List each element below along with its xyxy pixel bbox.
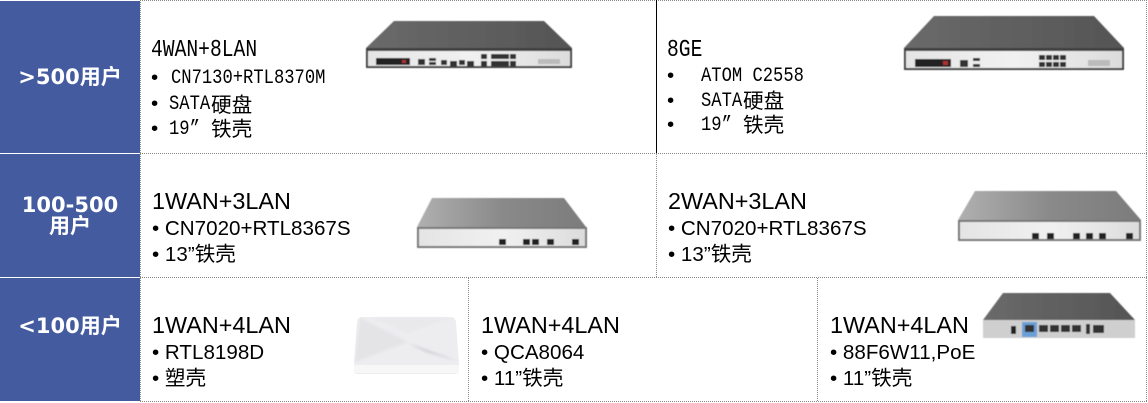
row label: >500 users xyxy=(0,1,140,153)
product cell: 2WAN+3LAN: • 13”铁壳 xyxy=(668,243,752,266)
product cell: 1WAN+3LAN: 1WAN+3LAN xyxy=(152,188,291,214)
product cell: 8GE: 8GE xyxy=(667,37,702,64)
product cell: 8GE: ATOM C2558 xyxy=(701,65,804,88)
product cell: 1WAN+3LAN: • 13”铁壳 xyxy=(152,243,236,266)
product cell: 4WAN+8LAN: 铁壳 xyxy=(211,112,252,142)
product cell: 1WAN+4LAN QCA8064: 1WAN+4LAN xyxy=(481,312,620,338)
product cell: 1WAN+4LAN QCA8064: • QCA8064 xyxy=(481,341,584,364)
product cell: 1WAN+4LAN RTL8198D: • 塑壳 xyxy=(152,367,206,390)
product cell: 4WAN+8LAN: • xyxy=(151,66,158,89)
icon: 19 inch router 8GE xyxy=(904,16,1124,70)
product cell: 1WAN+3LAN xyxy=(152,188,351,266)
row label: 100-500 users: 用户 xyxy=(49,214,91,238)
product cell: 1WAN+4LAN 88F6W11: • 88F6W11,PoE xyxy=(830,341,975,364)
product cell: 2WAN+3LAN: • CN7020+RTL8367S xyxy=(668,217,867,240)
product cell: 1WAN+4LAN 88F6W11: 1WAN+4LAN xyxy=(830,312,969,338)
row label: 100-500 users: 100-500 xyxy=(22,192,118,216)
product cell: 2WAN+3LAN xyxy=(668,188,867,266)
icon: desktop router 88F6W11 xyxy=(983,293,1135,338)
product cell: 8GE: • xyxy=(667,113,674,136)
product cell: 1WAN+3LAN: • CN7020+RTL8367S xyxy=(152,217,351,240)
icon: 13 inch router 1WAN+3LAN xyxy=(417,198,587,248)
product cell: 4WAN+8LAN: • xyxy=(151,92,158,115)
product cell: 4WAN+8LAN: 4WAN+8LAN xyxy=(151,37,257,64)
product cell: 8GE: 铁壳 xyxy=(743,108,784,138)
product cell: 4WAN+8LAN: SATA xyxy=(169,93,210,116)
product cell: 1WAN+4LAN QCA8064: • 11”铁壳 xyxy=(481,367,563,390)
icon: 13 inch router 2WAN+3LAN xyxy=(958,191,1141,241)
product cell: 8GE: 硬盘 xyxy=(743,84,784,114)
icon: 19 inch router 4WAN+8LAN xyxy=(366,21,572,68)
product cell: 4WAN+8LAN: 19” xyxy=(169,118,200,141)
row label: 100-500 users xyxy=(0,154,140,277)
product cell: 4WAN+8LAN: CN7130+RTL8370M xyxy=(171,67,325,90)
product cell: 1WAN+4LAN 88F6W11 xyxy=(830,312,975,390)
product cell: 1WAN+4LAN 88F6W11: • 11”铁壳 xyxy=(830,367,912,390)
product cell: 1WAN+4LAN RTL8198D: • RTL8198D xyxy=(152,341,264,364)
row label: <100 users: <100用户 xyxy=(18,314,122,338)
row label: <100 users xyxy=(0,278,140,401)
product cell: 8GE xyxy=(667,37,804,138)
product cell: 8GE: • xyxy=(667,64,674,87)
icon: white plastic router xyxy=(354,317,459,374)
product cell: 1WAN+4LAN QCA8064 xyxy=(481,312,620,390)
product cell: 8GE: 19” xyxy=(701,114,732,137)
product cell: 8GE: SATA xyxy=(701,90,742,113)
product cell: 1WAN+4LAN RTL8198D xyxy=(152,312,291,390)
product cell: 2WAN+3LAN: 2WAN+3LAN xyxy=(668,188,807,214)
product cell: 8GE: • xyxy=(667,89,674,112)
product cell: 4WAN+8LAN: • xyxy=(151,117,158,140)
product cell: 4WAN+8LAN: 硬盘 xyxy=(211,88,252,118)
product cell: 1WAN+4LAN RTL8198D: 1WAN+4LAN xyxy=(152,312,291,338)
row label: >500 users: >500用户 xyxy=(18,64,122,88)
product cell: 4WAN+8LAN xyxy=(151,37,325,142)
